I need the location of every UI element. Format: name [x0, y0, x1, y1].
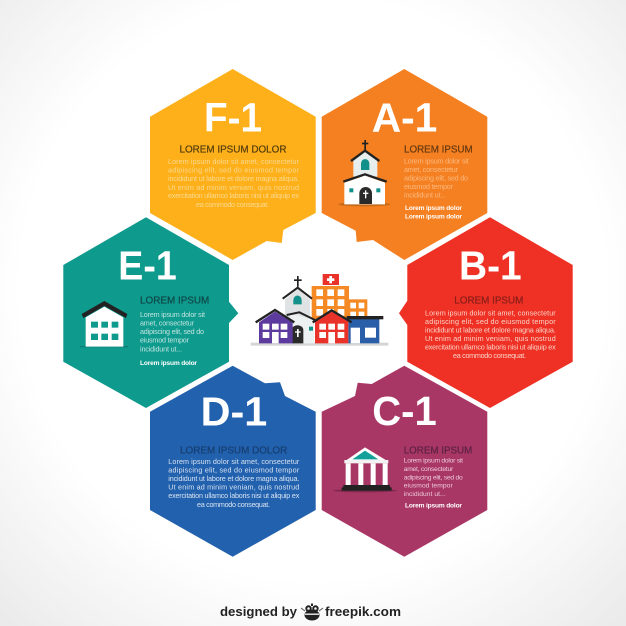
footer: designed by freepik.com: [220, 604, 401, 620]
body text: ea commodo consequat.: [453, 351, 526, 360]
link text: Lorem ipsum dolor: [405, 214, 462, 221]
icon: temple: [333, 447, 397, 492]
body text: eiusmod tempor: [404, 182, 454, 191]
icon: house: [80, 301, 128, 347]
body text: eiusmod tempor: [140, 336, 190, 345]
body text: [168, 157, 300, 209]
body text: amet, consectetur: [404, 165, 459, 174]
panel: C-1: [322, 366, 487, 557]
panel: E-1: [63, 217, 238, 408]
footer: designed by freepik.com: designed by: [220, 604, 298, 619]
heading: E-1: E-1: [118, 242, 177, 288]
body text: incididunt ut labore et dolore magna aliqua.: [168, 174, 299, 183]
panel: F-1: [150, 69, 316, 260]
body text: Ut enim ad minim veniam, quis nostrud: [168, 483, 299, 492]
heading: D-1: D-1: [201, 389, 267, 435]
body text: Ut enim ad minim veniam, quis nostrud: [168, 183, 299, 192]
body text: adipiscing elit, sed do: [404, 474, 463, 481]
body text: adipiscing elit, sed do: [140, 327, 204, 336]
link text: Lorem ipsum dolor: [405, 503, 462, 510]
panel: A-1: [322, 69, 487, 260]
panel: D-1: [150, 366, 316, 557]
body text: adipiscing elit, sed do: [404, 173, 468, 182]
body text: Lorem ipsum dolor sit amet, consectetur: [425, 308, 556, 317]
icon: church: [338, 140, 390, 206]
body text: amet, consectetur: [404, 466, 454, 473]
body text: [425, 308, 556, 360]
subheading: LOREM IPSUM: [404, 144, 473, 156]
body text: ea commodo consequat.: [197, 500, 270, 509]
body text: adipiscing elit, sed do eiusmod tempor: [425, 317, 556, 326]
body text: ea commodo consequat.: [196, 200, 269, 209]
heading: F-1: F-1: [204, 95, 262, 141]
body text: adipiscing elit, sed do eiusmod tempor: [168, 466, 300, 475]
body text: Lorem ipsum dolor sit amet, consectetur: [168, 157, 300, 166]
body text: amet, consectetur: [140, 319, 195, 328]
subheading: LOREM IPSUM DOLOR: [180, 444, 288, 456]
footer: designed by freepik.com: freepik.com: [325, 604, 401, 619]
body text: Ut enim ad minim veniam, quis nostrud: [425, 334, 556, 343]
body text: adipiscing elit, sed do eiusmod tempor: [168, 166, 300, 175]
subheading: LOREM IPSUM: [404, 444, 472, 456]
body text: exercitation ullamco laboris nisi ut aliquip ex: [168, 491, 300, 500]
body text: Lorem ipsum dolor sit: [404, 156, 469, 165]
body text: Lorem ipsum dolor sit: [140, 310, 205, 319]
subheading: LOREM IPSUM DOLOR: [180, 144, 287, 156]
body text: Lorem ipsum dolor sit: [404, 457, 463, 464]
body text: [168, 457, 300, 509]
subheading: LOREM IPSUM: [140, 294, 209, 306]
body text: exercitation ullamco laboris nisi ut aliquip ex: [425, 342, 556, 352]
illustration: central town: [251, 274, 388, 346]
body text: [140, 310, 205, 353]
icon: freepik bee: [301, 604, 323, 620]
body text: Lorem ipsum dolor sit amet, consectetur: [168, 457, 300, 466]
body text: eiusmod tempor: [404, 482, 453, 490]
heading: C-1: C-1: [372, 388, 437, 434]
subheading: LOREM IPSUM: [454, 294, 523, 306]
body text: incididunt ut labore et dolore magna aliqua.: [168, 474, 299, 483]
body text: [404, 457, 463, 498]
body text: [404, 156, 469, 200]
heading: A-1: A-1: [372, 95, 437, 141]
body text: exercitation ullamco laboris nisi ut aliquip ex: [168, 191, 299, 200]
heading: B-1: B-1: [459, 242, 522, 288]
body text: incididunt ut...: [140, 344, 182, 353]
link text: [405, 205, 462, 221]
link text: Lorem ipsum dolor: [140, 360, 197, 367]
panel: B-1: [399, 217, 573, 408]
body text: incididunt ut...: [404, 491, 446, 498]
body text: incididunt ut labore et dolore magna aliqua.: [425, 326, 556, 334]
link text: Lorem ipsum dolor: [405, 205, 462, 212]
body text: incididunt ut...: [404, 190, 446, 200]
